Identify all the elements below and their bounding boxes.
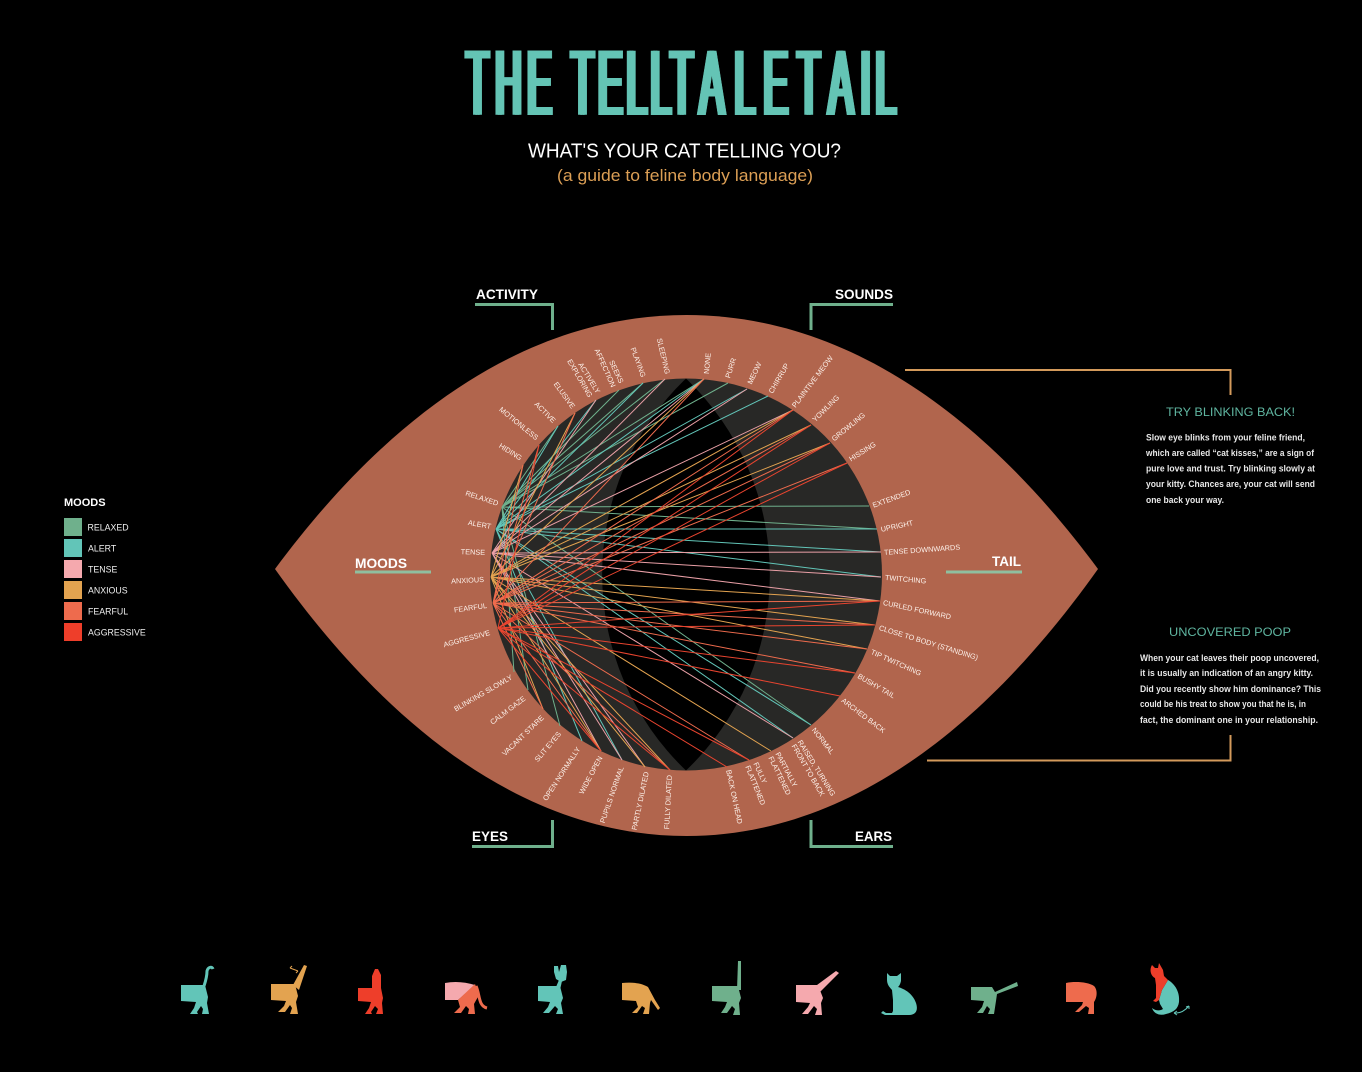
labels: eyes: PARTLY DILATED — [630, 771, 651, 831]
labels: tail: ARCHED BACK — [840, 696, 887, 735]
labels: activity: HIDING — [497, 441, 524, 462]
iris circle — [490, 378, 882, 770]
labels: sounds: PLAINTIVE MEOW — [790, 354, 835, 409]
labels: ears: PARTIALLY — [774, 751, 799, 789]
labels: sounds: GROWLING — [830, 410, 867, 443]
callout: try blinking back — [1145, 405, 1315, 505]
labels: ears: RAISED, TURNING — [796, 738, 838, 798]
labels: activity: SEEKS — [607, 359, 626, 385]
legend: anxious: ANXIOUS — [88, 586, 128, 596]
labels: ears: BACK ON HEAD — [724, 769, 744, 825]
callout: uncovered poop: When your cat leaves their poop uncovered, — [1140, 653, 1319, 663]
labels: tail: EXTENDED — [871, 488, 912, 510]
callout connector: poop — [927, 735, 1230, 760]
labels: tail — [840, 488, 979, 735]
legend: anxious — [64, 581, 128, 599]
labels: moods: ANXIOUS — [451, 575, 484, 586]
icon: sitting cat, alert — [881, 973, 917, 1015]
pupil — [602, 378, 770, 770]
icon: bushy fuzzy tail, alert — [538, 965, 567, 1014]
heading: ears — [811, 820, 893, 846]
icon: bushy tail up, aggressive — [358, 969, 383, 1014]
labels: eyes: OPEN NORMALLY — [541, 745, 582, 802]
callout: uncovered poop: it is usually an indication of an angry kitty. — [1140, 668, 1313, 678]
chord lines: tense — [492, 379, 881, 767]
labels: moods: TENSE — [461, 547, 485, 557]
labels: ears: FLATTENED — [766, 755, 793, 796]
title: THE TELLTALE TAIL — [467, 32, 896, 134]
labels: moods — [442, 489, 500, 649]
labels: moods: FEARFUL — [453, 601, 488, 615]
labels: ears: NORMAL — [810, 726, 836, 756]
icon: tail low, anxious — [622, 983, 660, 1014]
heading: moods — [355, 556, 431, 572]
heading: sounds: SOUNDS — [835, 287, 893, 302]
heading: tail — [946, 554, 1022, 572]
labels: activity: MOTIONLESS — [497, 405, 540, 442]
labels: sounds: NONE — [702, 352, 713, 374]
legend heading: MOODS — [64, 497, 106, 509]
labels: tail: CURLED FORWARD — [882, 598, 952, 621]
callout: try blinking back: which are called “cat kisses,” are a sign of — [1145, 448, 1314, 458]
subtitle: WHAT'S YOUR CAT TELLING YOU? — [528, 140, 841, 162]
icon: tail down curled, tense and fearful — [445, 982, 487, 1014]
legend: relaxed — [64, 518, 129, 536]
legend: relaxed: RELAXED — [88, 522, 129, 532]
eye shape — [275, 315, 1098, 836]
icon: tail twitching, anxious — [271, 965, 307, 1014]
labels: tail: TWITCHING — [885, 573, 927, 586]
heading: moods: MOODS — [355, 556, 407, 571]
icon: tail straight up, relaxed — [712, 961, 741, 1015]
labels: activity: ACTIVE — [533, 400, 558, 425]
labels: eyes: CALM GAZE — [488, 694, 527, 727]
labels: tail: UPRIGHT — [880, 518, 914, 534]
legend: fearful — [64, 602, 128, 620]
labels: tail: TENSE DOWNWARDS — [884, 543, 961, 557]
labels: moods: RELAXED — [464, 489, 500, 508]
labels: sounds: HISSING — [847, 440, 878, 463]
icon: tail raised diagonal, tense — [796, 971, 839, 1015]
labels: sounds: MEOW — [745, 360, 764, 386]
legend: tense — [64, 560, 117, 578]
callout: try blinking back: one back your way. — [1146, 495, 1224, 505]
callout: uncovered poop: could be his treat to show you that he is, in — [1140, 699, 1306, 709]
labels: sounds: YOWLING — [810, 393, 841, 424]
labels: moods: AGGRESSIVE — [442, 628, 491, 649]
labels: eyes: SLIT EYES — [532, 730, 563, 764]
labels: tail: CLOSE TO BODY (STANDING) — [878, 623, 979, 662]
callout: uncovered poop — [1140, 625, 1321, 725]
callout: try blinking back: TRY BLINKING BACK! — [1166, 405, 1295, 419]
heading: eyes: EYES — [472, 829, 508, 844]
labels: activity: SLEEPING — [655, 337, 672, 375]
chord lines: fearful — [493, 379, 880, 770]
legend: fearful: FEARFUL — [88, 606, 128, 616]
panel: moods legend — [64, 497, 146, 641]
labels: activity: ELUSIVE — [552, 380, 577, 410]
labels: eyes — [452, 673, 674, 831]
chord lines: relaxed — [502, 379, 877, 726]
labels: activity: PLAYING — [629, 346, 648, 379]
labels: eyes: FULLY DILATED — [662, 775, 674, 829]
chord lines: aggressive — [498, 410, 880, 770]
labels: ears: FLATTENED — [743, 764, 767, 806]
labels: activity — [497, 337, 672, 462]
labels: sounds: CHIRRUP — [767, 362, 791, 395]
callout: uncovered poop: Did you recently show him dominance? This — [1140, 684, 1321, 694]
callout connector: blinking — [905, 370, 1230, 395]
labels: sounds: PURR — [723, 357, 738, 379]
labels: ears: FRONT TO BACK — [790, 742, 827, 798]
labels: eyes: WIDE OPEN — [577, 755, 604, 796]
labels: ears: FULLY — [751, 761, 769, 785]
callout: uncovered poop: UNCOVERED POOP — [1169, 625, 1291, 639]
labels: activity: AFFECTION — [593, 347, 618, 389]
icon: tail tucked, fearful — [1066, 982, 1097, 1014]
labels: activity: ACTIVELY — [576, 361, 602, 395]
labels: tail: BUSHY TAIL — [856, 672, 897, 700]
heading: sounds — [811, 287, 893, 330]
labels: activity: EXPLORING — [565, 358, 595, 399]
labels: ears — [724, 726, 838, 825]
callout: try blinking back: your kitty. Chances are, your cat will send — [1146, 479, 1315, 489]
labels: moods: ALERT — [467, 518, 492, 531]
legend: tense: TENSE — [88, 564, 117, 574]
legend: aggressive: AGGRESSIVE — [88, 628, 146, 638]
heading: eyes — [472, 820, 552, 846]
labels: eyes: PUPILS NORMAL — [598, 765, 626, 824]
heading: activity: ACTIVITY — [476, 287, 538, 302]
labels: eyes: BLINKING SLOWLY — [452, 673, 514, 713]
labels: sounds — [702, 352, 878, 463]
callout: try blinking back: Slow eye blinks from your feline friend, — [1146, 432, 1305, 442]
labels: tail: TIP TWITCHING — [869, 647, 923, 678]
legend: alert: ALERT — [88, 544, 117, 554]
icon: tail up hooked, alert — [181, 967, 213, 1014]
chord lines: anxious — [491, 379, 880, 770]
callout: uncovered poop: fact, the dominant one in your relationship. — [1140, 715, 1318, 725]
labels: eyes: VACANT STARE — [500, 713, 546, 758]
heading: tail: TAIL — [992, 554, 1021, 569]
icon: tail extended, relaxed — [971, 982, 1018, 1014]
heading: ears: EARS — [855, 829, 892, 844]
callout: try blinking back: pure love and trust. Try blinking slowly at — [1146, 464, 1315, 474]
tagline: (a guide to feline body language) — [557, 166, 813, 185]
icon: sitting cat, aggressive and alert — [1151, 963, 1189, 1015]
chord lines: alert — [496, 379, 881, 760]
legend: aggressive — [64, 623, 146, 641]
legend: alert — [64, 539, 117, 557]
heading: activity — [475, 287, 552, 330]
